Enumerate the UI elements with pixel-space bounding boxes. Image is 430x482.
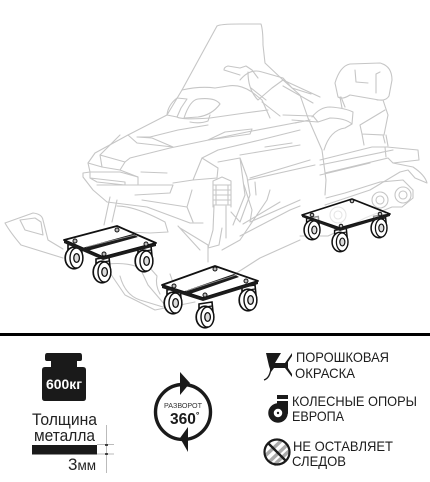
label: casters Europe <box>292 393 417 424</box>
dolly: rear <box>302 199 390 252</box>
rotation icon: 360 degrees: 360 <box>170 411 196 428</box>
label: powder coating: ОКРАСКА <box>295 365 356 381</box>
metal thickness: 3 mm: 3мм <box>68 455 96 474</box>
rotation icon: 360 degrees: РАЗВОРОТ <box>164 401 202 410</box>
weight icon: 600 kg <box>42 353 86 401</box>
rotation icon: 360 degrees: ° <box>196 410 200 420</box>
label: powder coating <box>295 349 389 381</box>
metal thickness: 3 mm: металла <box>34 427 96 445</box>
label: leaves no marks: СЛЕДОВ <box>292 453 346 469</box>
metal thickness: 3 mm: Толщина <box>32 411 98 429</box>
rotation icon: 360 degrees <box>156 372 210 452</box>
label: casters Europe: ЕВРОПА <box>292 408 345 424</box>
divider bar <box>0 333 430 336</box>
metal thickness: 3 mm <box>32 411 114 474</box>
icon: caster wheel <box>271 395 288 420</box>
icon: powder coating spray <box>264 353 292 380</box>
label: leaves no marks: НЕ ОСТАВЛЯЕТ <box>293 438 393 454</box>
icon: no marks <box>264 440 290 465</box>
label: casters Europe: КОЛЕСНЫЕ ОПОРЫ <box>292 393 417 409</box>
label: powder coating: ПОРОШКОВАЯ <box>296 349 389 365</box>
weight icon: 600 kg: 600кг <box>46 377 82 392</box>
snowmobile outline illustration <box>5 24 427 310</box>
dolly: front left <box>64 226 156 283</box>
label: leaves no marks <box>292 438 393 469</box>
dolly: front right <box>162 266 258 328</box>
